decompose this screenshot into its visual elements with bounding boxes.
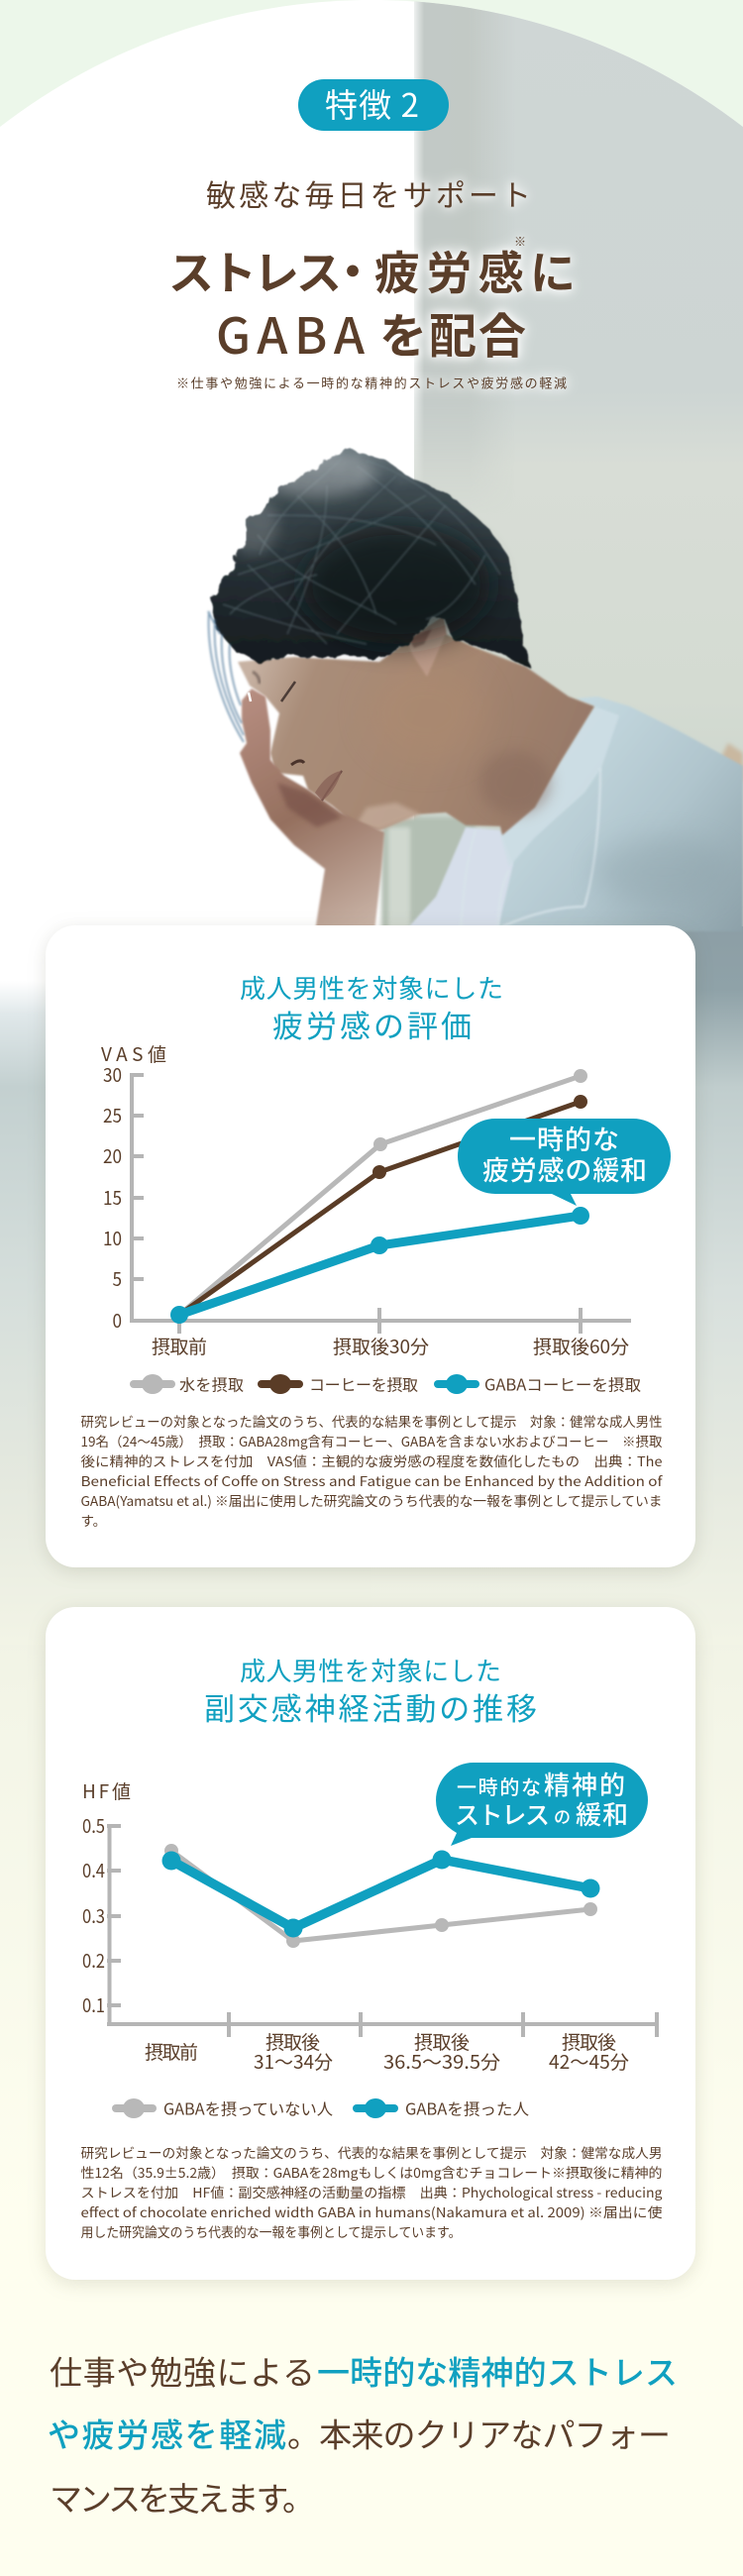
man's hair [208, 450, 529, 742]
series: no GABA [164, 1844, 597, 1948]
series: water [179, 1069, 587, 1315]
panel heading [240, 969, 503, 1046]
line chart: VAS value: 摂取後30分 [333, 1333, 429, 1359]
line chart: HF value: 0.2 [82, 1947, 105, 1974]
callout: temporary fatigue relief: 一時的な [509, 1119, 619, 1157]
line chart: HF value: HF値 [82, 1777, 131, 1804]
chart legend: GABAを摂っていない人 [163, 2096, 333, 2120]
callout: temporary mental stress relief: ストレス [455, 1796, 550, 1832]
chart legend: GABAを摂った人 [405, 2096, 529, 2120]
line chart: HF value: 31～34分 [254, 2048, 333, 2075]
line chart: HF value: 摂取後 [265, 2028, 320, 2055]
closing statement: マンスを支えます。 [50, 2473, 315, 2521]
closing statement: や疲労感を軽減 [48, 2410, 286, 2457]
chart legend [116, 2096, 529, 2120]
line chart: VAS value: 0 [113, 1307, 122, 1334]
line chart: VAS value: 15 [103, 1184, 122, 1211]
line chart: HF value: 42～45分 [549, 2048, 629, 2075]
headline footnote: ※仕事や勉強による一時的な精神的ストレスや疲労感の軽減 [176, 373, 567, 392]
panel heading: 成人男性を対象にした [240, 969, 503, 1006]
main headline: ※ [514, 233, 526, 250]
line chart: VAS value [101, 1040, 671, 1359]
main headline: 疲労感に [374, 238, 576, 303]
line chart: HF value [82, 1763, 657, 2075]
closing statement [48, 2346, 678, 2521]
panel heading: 成人男性を対象にした [240, 1652, 501, 1688]
line chart: HF value: 摂取前 [145, 2038, 198, 2065]
main headline: GABA [216, 297, 366, 369]
man's hand [240, 689, 384, 931]
series: GABA coffee [170, 1207, 589, 1324]
man's closed eye, nostril, lips [281, 682, 295, 701]
feature badge: 特徴 2 [325, 79, 419, 127]
main headline [168, 233, 576, 369]
line chart: VAS value: VAS値 [101, 1040, 166, 1067]
chart legend [134, 1371, 641, 1395]
line chart: HF value: 0.5 [82, 1812, 105, 1839]
panel heading: 疲労感の評価 [272, 1002, 472, 1046]
line chart: VAS value: 30 [103, 1061, 122, 1088]
feature badge [298, 79, 449, 131]
chart legend: GABAコーヒーを摂取 [484, 1371, 641, 1395]
line chart: HF value: 0.4 [82, 1857, 105, 1883]
man's ear [410, 621, 446, 676]
study note: 研究レビューの対象となった論文のうち、代表的な結果を事例として提示 対象：健常な成人男 [81, 2142, 662, 2162]
study note: Beneficial Effects of Coffe on Stress and Fatigue can be Enhanced by the Addition of [81, 1470, 663, 1490]
hero photo: tired man holding his head [0, 0, 743, 1645]
chart legend: コーヒーを摂取 [309, 1371, 418, 1395]
main headline: を配合 [379, 297, 526, 367]
study note: effect of chocolate enriched width GABA in humans(Nakamura et al. 2009) ※届出に使 [81, 2201, 663, 2221]
closing statement: 一時的な精神的ストレス [317, 2346, 678, 2394]
study note: GABA(Yamatsu et al.) ※届出に使用した研究論文のうち代表的な一報を事例として提示していま [81, 1490, 662, 1510]
man's shirt [495, 697, 743, 931]
line chart: VAS value: 10 [103, 1225, 122, 1251]
line chart: VAS value: 25 [103, 1102, 122, 1128]
study note: 後に精神的ストレスを付加 VAS値：主観的な疲労感の程度を数値化したもの 出典：The [81, 1450, 662, 1470]
main headline: ストレス [168, 238, 342, 303]
callout: temporary mental stress relief [436, 1763, 648, 1846]
subtitle: 敏感な毎日をサポート [206, 171, 531, 215]
study note: ストレスを付加 HF値：副交感神経の活動量の指標 出典：Phychological stress - reducing [81, 2182, 663, 2201]
line chart: HF value: 0.3 [82, 1902, 105, 1929]
callout: temporary mental stress relief: 緩和 [576, 1795, 628, 1832]
panel: fatigue evaluation [46, 925, 695, 1567]
closing statement: 。本来のクリアなパフォー [287, 2410, 671, 2457]
callout: temporary mental stress relief: 一時的な [457, 1771, 541, 1800]
callout: temporary fatigue relief [458, 1119, 671, 1206]
line chart: HF value: 摂取後 [414, 2028, 470, 2055]
closing statement: 仕事や勉強による [50, 2346, 315, 2394]
callout: temporary mental stress relief: 精神的 [544, 1766, 625, 1802]
panel heading [204, 1652, 537, 1729]
line chart: HF value: 摂取後 [562, 2028, 616, 2055]
main headline: ・ [330, 237, 375, 302]
line chart: VAS value: 20 [103, 1142, 122, 1169]
panel heading: 副交感神経活動の推移 [204, 1684, 537, 1729]
panel: parasympathetic activity [46, 1607, 695, 2280]
line chart: VAS value: 摂取前 [152, 1333, 207, 1359]
line chart: VAS value: 5 [113, 1265, 122, 1292]
series: coffee [179, 1095, 587, 1315]
line chart: HF value: 0.1 [82, 1991, 105, 2018]
man's face and neck [238, 617, 594, 835]
callout: temporary fatigue relief: 疲労感の緩和 [482, 1149, 647, 1188]
study note [81, 1411, 663, 1530]
series: with GABA [162, 1851, 600, 1938]
study note: す。 [81, 1510, 106, 1530]
chart legend: 水を摂取 [179, 1371, 244, 1395]
study note: 研究レビューの対象となった論文のうち、代表的な結果を事例として提示 対象：健常な成人男性 [81, 1411, 662, 1431]
study note [81, 2142, 663, 2241]
hero text block [168, 79, 576, 392]
line chart: VAS value: 摂取後60分 [533, 1333, 629, 1359]
study note: 19名（24～45歳） 摂取：GABA28mg含有コーヒー、GABAを含まない水およびコーヒー ※摂取 [81, 1431, 663, 1450]
study note: 性12名（35.9±5.2歳） 摂取：GABAを28mgもしくは0mg含むチョコレート※摂取後に精神的 [81, 2162, 662, 2182]
study note: 用した研究論文のうち代表的な一報を事例として提示しています。 [81, 2221, 462, 2241]
callout: temporary mental stress relief: の [554, 1803, 571, 1828]
line chart: HF value: 36.5～39.5分 [383, 2048, 500, 2075]
